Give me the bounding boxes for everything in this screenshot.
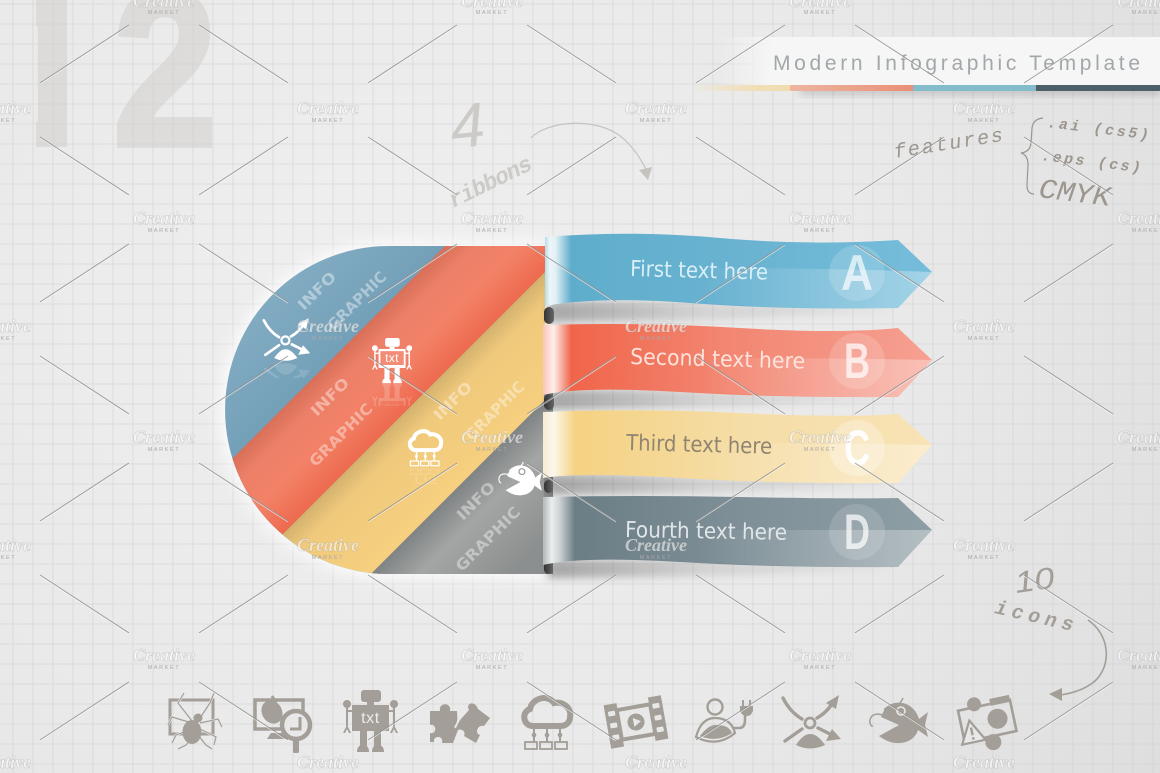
Creative Market watermarks: Creative <box>461 427 523 447</box>
ribbon D: D <box>844 504 870 560</box>
Creative Market watermarks: Creative <box>953 98 1015 118</box>
icon: fish on grey band <box>499 462 542 495</box>
icon: cloud on yellow band <box>408 429 444 484</box>
Creative Market watermarks: MARKET <box>148 228 180 234</box>
ribbon A <box>545 234 932 308</box>
ribbon B <box>543 324 932 397</box>
icon: bug magnifier <box>255 696 310 753</box>
Creative Market watermarks: Creative <box>625 316 687 336</box>
handwritten note: features: CMYK <box>1037 175 1113 215</box>
Creative Market watermarks: Creative <box>789 427 851 447</box>
Creative Market watermarks: Creative <box>789 645 851 665</box>
icon: robot on red band <box>372 338 412 406</box>
handwritten note: features: .ai (cs5) <box>1046 115 1150 144</box>
band: blue <box>220 240 560 580</box>
handwritten note: 4 ribbons: ribbons <box>445 151 537 214</box>
ribbon B: Second text here <box>630 345 805 375</box>
Creative Market watermarks: MARKET <box>476 447 508 453</box>
ribbon shadows <box>548 302 898 578</box>
band labels: GRAPHIC <box>306 400 376 470</box>
Creative Market watermarks: MARKET <box>968 336 1000 342</box>
icon: cloud network <box>524 698 570 749</box>
Creative Market watermarks: MARKET <box>804 228 836 234</box>
icon: arrows on blue band <box>262 318 310 378</box>
Creative Market watermarks: Creative <box>625 98 687 118</box>
Creative Market watermarks: MARKET <box>148 10 180 16</box>
icon: spider <box>168 693 222 749</box>
Creative Market watermarks: MARKET <box>640 555 672 561</box>
handwritten note: 10 icons <box>992 562 1106 701</box>
Creative Market watermarks: MARKET <box>148 447 180 453</box>
Creative Market watermarks: MARKET <box>640 336 672 342</box>
Creative Market watermarks: Creative <box>461 645 523 665</box>
Creative Market watermarks: Creative <box>625 535 687 555</box>
Creative Market watermarks: MARKET <box>312 555 344 561</box>
Creative Market watermarks: MARKET <box>312 118 344 124</box>
Creative Market watermarks: Creative <box>297 535 359 555</box>
ribbon C <box>543 410 932 483</box>
bottom icon row <box>168 690 1019 756</box>
ribbon D <box>543 496 932 567</box>
big number 12 <box>36 0 212 148</box>
panel: diagonal capsule <box>225 246 553 574</box>
Creative Market watermarks: Creative <box>297 316 359 336</box>
Creative Market watermarks: Creative <box>953 316 1015 336</box>
band labels: GRAPHIC <box>324 268 390 334</box>
Creative Market watermarks: Creative <box>953 752 1015 772</box>
title banner: Modern Infographic Template <box>773 52 1140 75</box>
Creative Market watermarks: Creative <box>297 752 359 772</box>
capsule glow <box>223 244 548 576</box>
ribbon C: C <box>844 420 870 476</box>
ribbon D: Fourth text here <box>625 518 787 546</box>
Creative Market watermarks: MARKET <box>312 336 344 342</box>
Creative Market watermarks: MARKET <box>476 665 508 671</box>
band labels: GRAPHIC <box>462 378 528 444</box>
Creative Market watermarks: MARKET <box>804 665 836 671</box>
Creative Market watermarks: MARKET <box>148 665 180 671</box>
handwritten note: 4 ribbons: 4 <box>447 90 488 162</box>
band labels: INFO <box>430 378 476 424</box>
Creative Market watermarks: Creative <box>133 645 195 665</box>
Creative Market watermarks: MARKET <box>968 118 1000 124</box>
title banner <box>690 37 1160 95</box>
Creative Market watermarks: MARKET <box>804 10 836 16</box>
icon: robot <box>343 690 398 752</box>
handwritten note: 10 icons: icons <box>992 597 1076 638</box>
icon: user with plug <box>696 700 753 742</box>
ribbon B: B <box>844 333 870 389</box>
handwritten note: features <box>892 115 1150 215</box>
icon: puzzle pieces <box>430 703 490 743</box>
Creative Market watermarks: Creative <box>789 208 851 228</box>
Creative Market watermarks: Creative <box>133 427 195 447</box>
handwritten note: features: .eps (cs) <box>1040 148 1142 177</box>
Creative Market watermarks: MARKET <box>476 228 508 234</box>
ribbon C: Third text here <box>625 431 772 460</box>
curls between ribbons <box>544 307 554 574</box>
icon: fish with hook <box>870 698 928 743</box>
band: grey <box>371 400 545 574</box>
icon: window with warning <box>953 690 1019 756</box>
band labels: INFO <box>307 374 353 420</box>
Creative Market watermarks: Creative <box>133 208 195 228</box>
Creative Market watermarks: Creative <box>461 208 523 228</box>
Creative Market watermarks: MARKET <box>640 118 672 124</box>
handwritten note: 4 ribbons <box>445 90 652 214</box>
band labels: INFO <box>453 478 499 524</box>
Creative Market watermarks: Creative <box>953 535 1015 555</box>
icon: film strip <box>604 695 668 749</box>
ribbon A: First text here <box>630 257 768 286</box>
band: yellow <box>282 272 545 574</box>
Creative Market watermarks: Creative <box>297 98 359 118</box>
band labels <box>294 268 528 575</box>
band: red <box>232 246 545 534</box>
Creative Market watermarks: MARKET <box>804 447 836 453</box>
Creative Market watermarks: MARKET <box>968 555 1000 561</box>
handwritten note: features: features <box>892 125 1005 165</box>
icon: crossing arrows <box>783 695 841 748</box>
handwritten note: 10 icons: 10 <box>1012 562 1057 600</box>
Creative Market watermarks: Creative <box>625 752 687 772</box>
ribbon A: A <box>841 245 873 301</box>
band labels: GRAPHIC <box>452 503 524 575</box>
grey band tab <box>544 392 553 574</box>
Creative Market watermarks: MARKET <box>476 10 508 16</box>
band labels: INFO <box>294 268 340 314</box>
